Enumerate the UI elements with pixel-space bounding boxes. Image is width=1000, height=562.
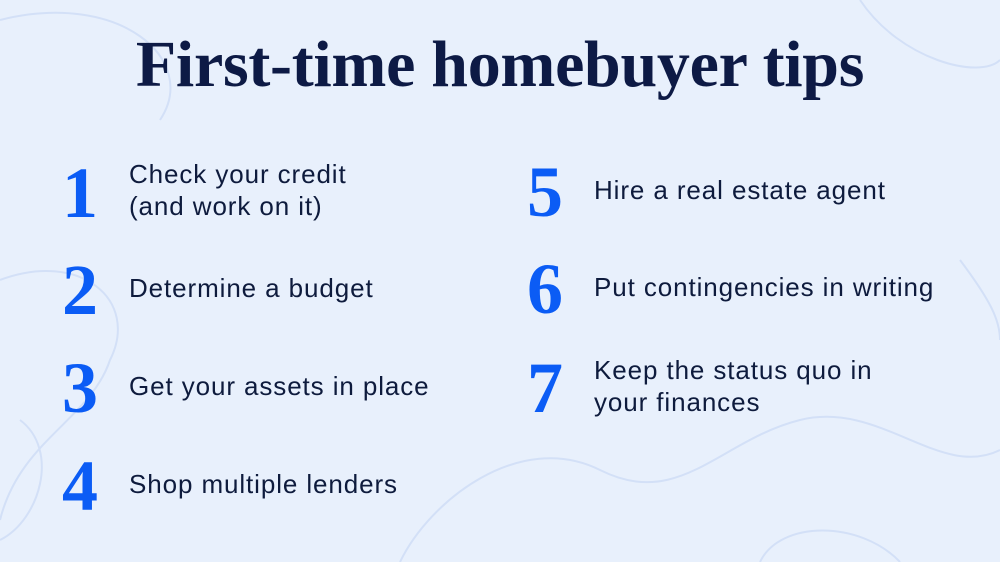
number 3: 3 bbox=[62, 348, 98, 428]
title: First-time homebuyer tips bbox=[136, 28, 864, 101]
tip 4 bbox=[62, 446, 398, 526]
text 6: Put contingencies in writing bbox=[594, 272, 934, 302]
text 7 bbox=[594, 355, 873, 417]
tip 6 bbox=[527, 249, 934, 329]
text 5: Hire a real estate agent bbox=[594, 175, 886, 205]
text 7: Keep the status quo in bbox=[594, 355, 873, 385]
text 1: (and work on it) bbox=[129, 191, 323, 221]
text 4: Shop multiple lenders bbox=[129, 469, 398, 499]
text 3: Get your assets in place bbox=[129, 371, 430, 401]
tip 1 bbox=[62, 153, 347, 233]
number 1: 1 bbox=[62, 153, 98, 233]
number 5: 5 bbox=[527, 152, 563, 232]
number 7: 7 bbox=[527, 348, 563, 428]
tip 5 bbox=[527, 152, 886, 232]
text 1: Check your credit bbox=[129, 159, 347, 189]
tip 3 bbox=[62, 348, 430, 428]
tip 2 bbox=[62, 250, 374, 330]
number 2: 2 bbox=[62, 250, 98, 330]
text 1 bbox=[129, 159, 347, 221]
text 7: your finances bbox=[594, 387, 760, 417]
number 4: 4 bbox=[62, 446, 98, 526]
tip 7 bbox=[527, 348, 873, 428]
number 6: 6 bbox=[527, 249, 563, 329]
text 2: Determine a budget bbox=[129, 273, 374, 303]
